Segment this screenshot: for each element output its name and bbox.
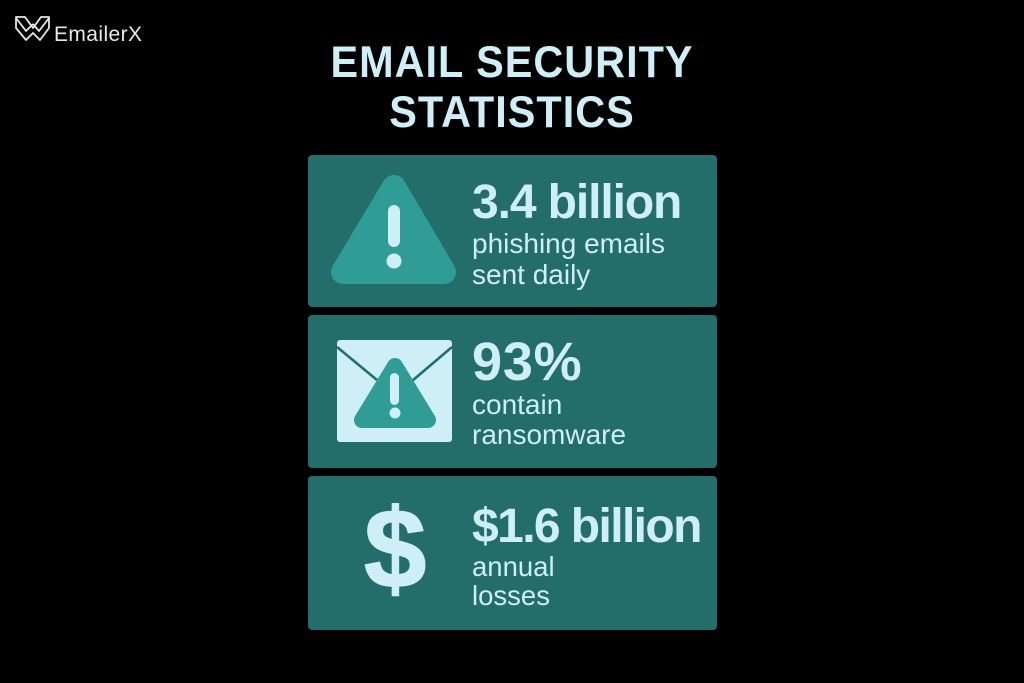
label: contain ransomware: ransomware [472, 419, 626, 450]
panel: phishing [308, 155, 717, 307]
logo: EmailerX [54, 23, 142, 46]
stat: 3.4 billion: 3.4 billion [472, 176, 681, 229]
icon: dollar sign: $ [364, 486, 426, 611]
label: annual losses: losses [472, 580, 550, 611]
label: contain ransomware: contain [472, 389, 562, 420]
title [330, 38, 694, 137]
label: phishing emails sent daily: sent daily [472, 259, 590, 290]
label: phishing emails sent daily: phishing emails [472, 228, 665, 259]
title: STATISTICS [389, 88, 635, 137]
logo [15, 16, 142, 46]
stat: 93%: 93% [472, 332, 582, 392]
label: phishing emails sent daily [472, 228, 665, 290]
stat: $1.6 billion: $1.6 billion [472, 500, 701, 553]
icon: envelope with warning [337, 340, 452, 442]
label: contain ransomware [472, 389, 626, 450]
title: EMAIL SECURITY [330, 38, 694, 87]
icon: warning triangle [331, 175, 456, 284]
label: annual losses [472, 551, 555, 611]
label: annual losses: annual [472, 551, 555, 582]
panel: ransomware [308, 315, 717, 468]
panel: losses [308, 476, 717, 630]
